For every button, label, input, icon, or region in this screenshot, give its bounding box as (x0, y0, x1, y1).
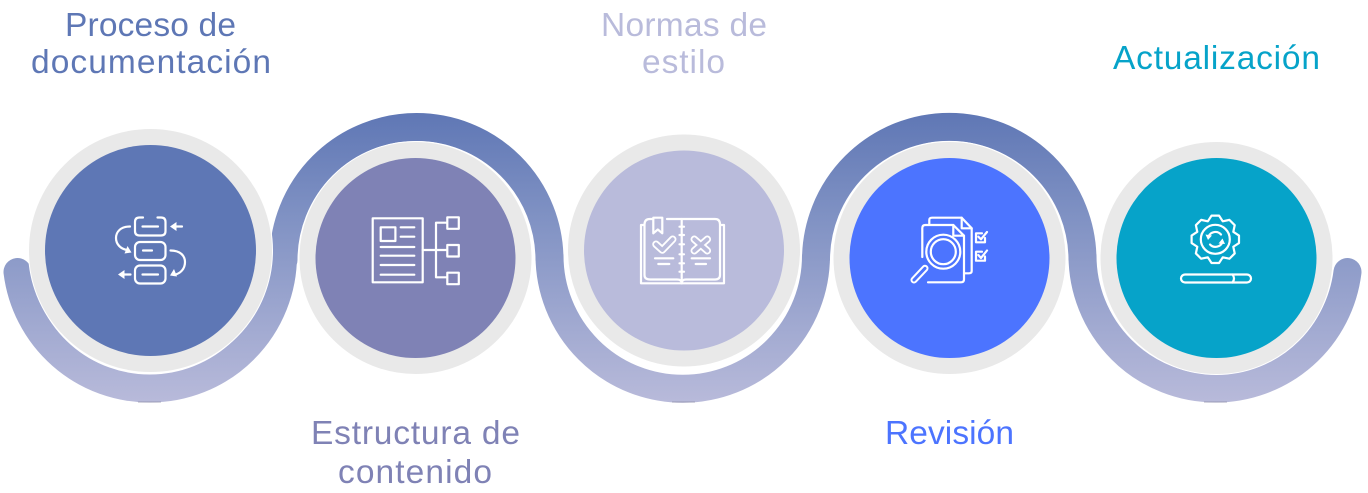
heading: estructura de contenido (311, 415, 520, 491)
icon: update gear with progress bar (1181, 216, 1251, 282)
heading: normas de estilo: Normas de (601, 7, 767, 44)
wave connector ribbon (18, 127, 1348, 402)
heading: actualización: Actualización (1113, 40, 1320, 77)
heading: normas de estilo: estilo (642, 44, 725, 81)
icon: document structure tree (373, 217, 459, 284)
panel: step 5 actualización (1100, 142, 1333, 374)
icon: magnifier over documents (914, 218, 987, 282)
panel: step 3 normas de estilo (568, 134, 800, 367)
panel: step 2 estructura de contenido (299, 142, 532, 374)
panel: step 4 revisión (833, 142, 1066, 374)
heading: proceso de documentación: Proceso de (65, 7, 236, 44)
panel: step 1 proceso de documentación (28, 128, 272, 372)
icon: open style guide book (641, 218, 724, 283)
heading: estructura de contenido: Estructura de (311, 415, 520, 452)
heading: proceso de documentación: documentación (31, 44, 271, 81)
heading: proceso de documentación (31, 7, 271, 81)
icon: process flow blocks (116, 218, 185, 284)
heading: normas de estilo (601, 7, 767, 81)
heading: estructura de contenido: contenido (338, 454, 492, 491)
heading: revisión: Revisión (885, 415, 1014, 452)
